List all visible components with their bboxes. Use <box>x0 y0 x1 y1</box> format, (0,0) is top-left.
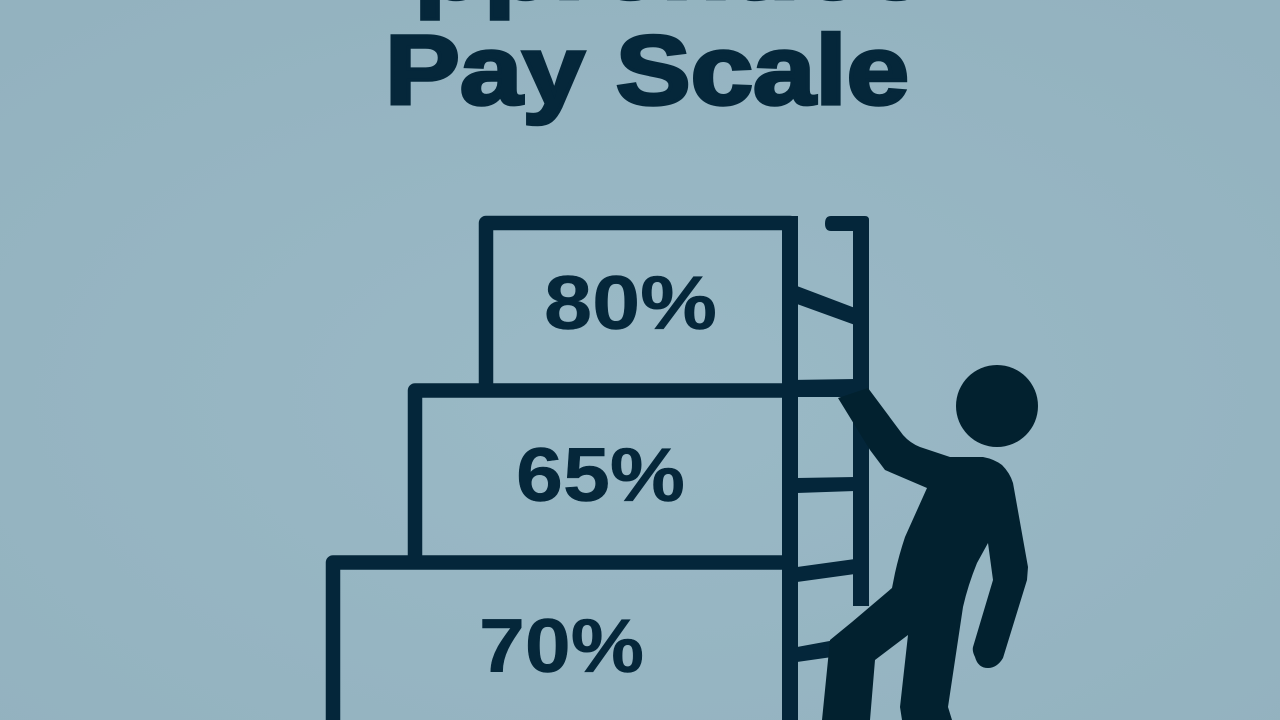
step: 70%: 70% <box>479 604 644 689</box>
ladder rungs <box>790 286 855 662</box>
ladder right rail with hook <box>825 216 869 606</box>
staircase of pay steps <box>333 223 790 720</box>
step: 65%: 65% <box>516 433 685 518</box>
person body <box>822 388 1028 720</box>
step: 65% <box>415 390 790 562</box>
step: 80%: 80% <box>544 261 717 346</box>
step: 80% <box>486 223 790 390</box>
title line 2: Pay Scale <box>385 15 909 125</box>
person head <box>956 365 1038 447</box>
ladder <box>782 216 869 720</box>
person climbing <box>822 365 1038 720</box>
title <box>332 0 927 125</box>
step: 70% <box>333 562 790 720</box>
ladder left rail <box>782 216 798 720</box>
